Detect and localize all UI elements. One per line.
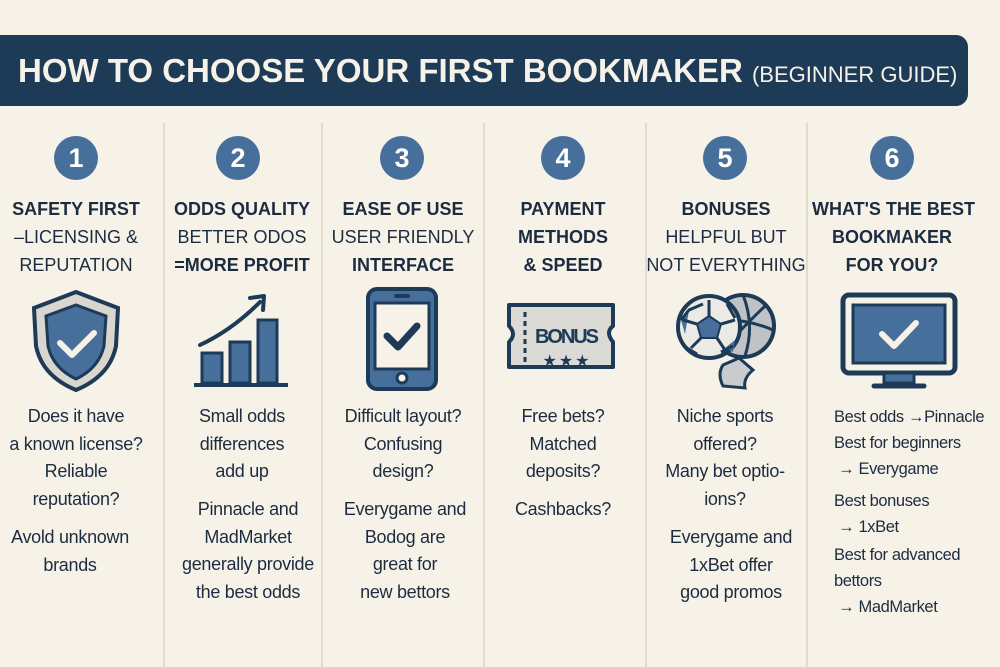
number 1 bbox=[54, 136, 98, 180]
number 6: 6 bbox=[884, 143, 900, 173]
body 5: ions? bbox=[704, 488, 746, 508]
icon: bar chart bbox=[194, 294, 288, 387]
icon: balls bbox=[676, 293, 776, 390]
panel: 2 odds: generally provide bbox=[182, 554, 314, 574]
icon: phone bbox=[366, 287, 438, 391]
icon: bonus ticket: ★★★ bbox=[542, 353, 592, 370]
body 4 bbox=[521, 406, 605, 481]
body 6: Best for beginners bbox=[834, 434, 961, 452]
heading 1: REPUTATION bbox=[19, 255, 133, 275]
heading 4: METHODS bbox=[518, 227, 608, 247]
body 1: reputation? bbox=[33, 488, 119, 508]
heading 6: FOR YOU? bbox=[846, 255, 938, 275]
panel: 5 bonuses: Everygame and bbox=[670, 527, 792, 547]
heading 2: BETTER ODOS bbox=[177, 227, 306, 247]
heading 4 bbox=[518, 199, 608, 275]
heading 3: INTERFACE bbox=[352, 255, 454, 275]
body 3: Difficult layout? bbox=[345, 406, 461, 426]
heading 5: BONUSES bbox=[681, 199, 770, 219]
panel: 2 odds: Pinnacle and bbox=[198, 499, 298, 519]
heading 6: BOOKMAKER bbox=[832, 227, 952, 247]
body 5: Niche sports bbox=[677, 406, 773, 426]
heading 6 bbox=[812, 199, 975, 275]
body 4: Free bets? bbox=[521, 406, 605, 426]
panel: 6 best: → MadMarket bbox=[838, 598, 937, 616]
heading 1 bbox=[12, 199, 140, 275]
body 3: design? bbox=[373, 461, 433, 481]
body 2: Small odds bbox=[199, 406, 285, 426]
body 6 bbox=[834, 408, 984, 478]
heading 3 bbox=[332, 199, 474, 275]
heading 3: EASE OF USE bbox=[342, 199, 464, 219]
heading 1: SAFETY FIRST bbox=[12, 199, 140, 219]
panel: 2 odds bbox=[174, 136, 314, 602]
icon: bonus ticket: BONUS bbox=[535, 326, 599, 348]
body 1 bbox=[9, 406, 143, 509]
panel: 6 best: bettors bbox=[834, 572, 882, 590]
number 6 bbox=[870, 136, 914, 180]
icon: shield bbox=[32, 290, 120, 392]
body 4: Matched bbox=[530, 434, 596, 454]
heading 2: ODDS QUALITY bbox=[174, 199, 310, 219]
number 3: 3 bbox=[394, 143, 410, 173]
body 4: deposits? bbox=[526, 461, 600, 481]
panel: 1 safety: Avold unknown bbox=[11, 527, 129, 547]
panel: 2 odds: MadMarket bbox=[204, 526, 292, 546]
number 5: 5 bbox=[717, 143, 733, 173]
body 5: offered? bbox=[693, 434, 757, 454]
number 3 bbox=[380, 136, 424, 180]
icon: monitor bbox=[840, 292, 958, 388]
body 6: Best odds →Pinnacle bbox=[834, 408, 984, 426]
heading 2: =MORE PROFIT bbox=[174, 255, 310, 275]
panel: 5 bonuses bbox=[646, 136, 806, 602]
number 2 bbox=[216, 136, 260, 180]
body 6: → Everygame bbox=[838, 460, 938, 478]
panel: 4 payment bbox=[507, 136, 615, 519]
number 5 bbox=[703, 136, 747, 180]
body 3: Confusing bbox=[364, 434, 442, 454]
heading 4: PAYMENT bbox=[520, 199, 606, 219]
panel: 6 best: Best bonuses bbox=[834, 492, 929, 510]
number 4 bbox=[541, 136, 585, 180]
panel: 5 bonuses: 1xBet offer bbox=[689, 554, 773, 574]
title banner: HOW TO CHOOSE YOUR FIRST BOOKMAKER (BEGINNER GUIDE) bbox=[18, 52, 957, 89]
icon: bonus ticket bbox=[507, 303, 615, 370]
heading 2 bbox=[174, 199, 310, 275]
body 5 bbox=[665, 406, 785, 508]
panel: 2 odds: the best odds bbox=[196, 582, 300, 602]
panel: 3 ease bbox=[332, 136, 474, 602]
panel: 6 best: Best for advanced bbox=[834, 546, 960, 564]
panel: 3 ease: new bettors bbox=[360, 582, 450, 602]
heading 5: HELPFUL BUT bbox=[665, 227, 787, 247]
heading 3: USER FRIENDLY bbox=[332, 227, 474, 247]
body 1: a known license? bbox=[9, 434, 143, 454]
body 5: Many bet optio- bbox=[665, 461, 785, 481]
heading 5 bbox=[646, 199, 806, 275]
panel: 3 ease: Everygame and bbox=[344, 499, 466, 519]
body 1: Reliable bbox=[45, 461, 107, 481]
panel: 6 best bbox=[812, 136, 984, 616]
heading 4: & SPEED bbox=[523, 255, 603, 275]
body 1: Does it have bbox=[28, 406, 124, 426]
panel: 3 ease: great for bbox=[373, 554, 437, 574]
heading 6: WHAT'S THE BEST bbox=[812, 199, 975, 219]
title banner bbox=[0, 35, 968, 106]
panel: 1 safety: brands bbox=[43, 554, 97, 574]
number 4: 4 bbox=[555, 143, 571, 173]
panel: 3 ease: Bodog are bbox=[365, 526, 445, 546]
body 2 bbox=[199, 406, 285, 481]
heading 5: NOT EVERYTHING bbox=[646, 255, 806, 275]
number 2: 2 bbox=[230, 143, 246, 173]
heading 1: –LICENSING & bbox=[14, 227, 138, 247]
panel: 1 safety bbox=[9, 136, 143, 574]
number 1: 1 bbox=[68, 143, 84, 173]
body 2: add up bbox=[215, 461, 269, 481]
panel: 6 best: → 1xBet bbox=[838, 518, 899, 536]
panel: 4 payment: Cashbacks? bbox=[515, 499, 611, 519]
body 2: differences bbox=[200, 434, 284, 454]
body 3 bbox=[345, 406, 461, 481]
panel: 5 bonuses: good promos bbox=[680, 582, 782, 602]
